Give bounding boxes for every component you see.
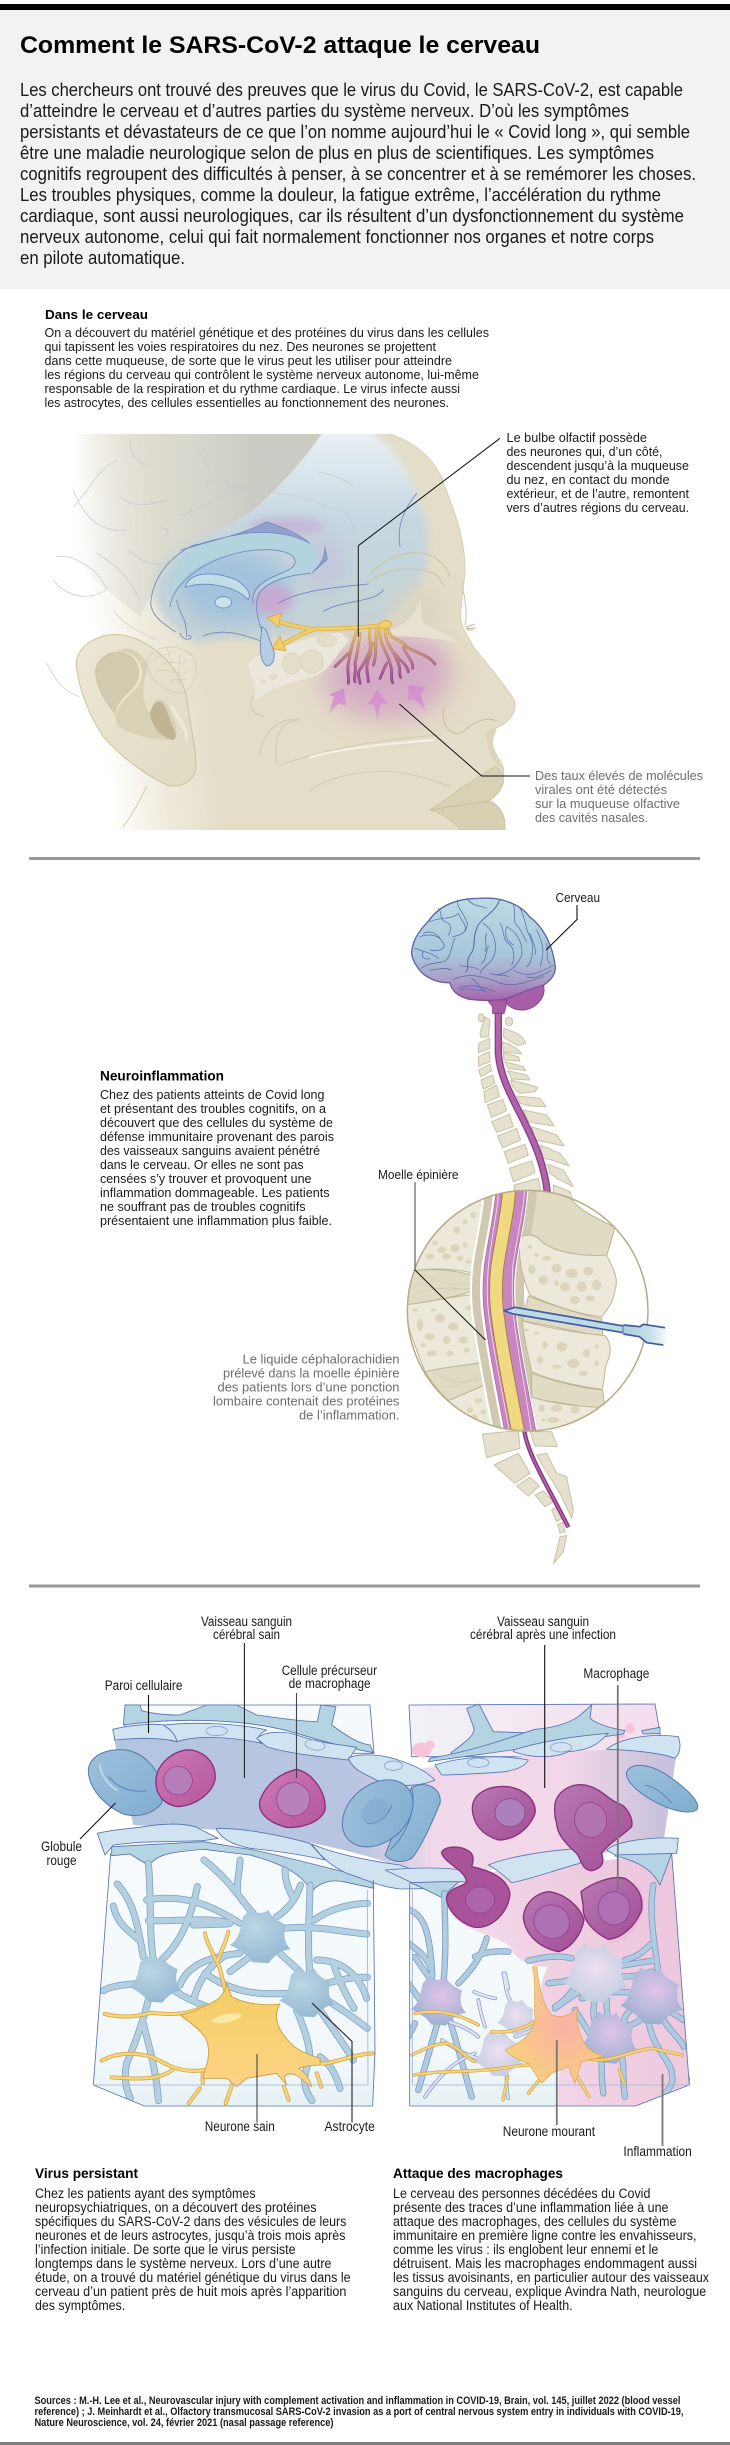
astrocytes, right [408,1885,684,2098]
divider [29,857,700,860]
right panel [385,1704,698,2106]
lower wall endfeet, right [410,1853,672,1897]
leader: Moelle épinière [415,1182,486,1340]
heading: Neuroinflammation: Neuroinflammation [100,1068,224,1084]
intro paragraph: être une maladie neurologique selon de plus en plus de scientifiques. Les symptômes [20,142,654,163]
bottom rule [0,2442,730,2445]
right vertebra 1 [519,1235,616,1317]
label: Vaisseau sanguin cérébral après une infection: cérébral après une infection [470,1627,616,1642]
head contour [390,434,515,830]
magnifier circle: spine cross-section [406,1190,667,1432]
disc 2 [425,1363,483,1400]
intro paragraph: en pilote automatique. [20,247,185,268]
text block: Attaque des macrophages: Le cerveau des personnes décédées du Covid [393,2186,650,2201]
sources: Nature Neuroscience, vol. 24, février 2021 (nasal passage reference) [34,2417,334,2429]
text block: Attaque des macrophages: détruisent. Mais les macrophages endommagent aussi [393,2256,697,2271]
label: Cerveau: Cerveau [556,890,600,905]
intro paragraph [20,79,696,268]
upper vertebrae [478,1014,573,1198]
callout: viral molecules: des cavités nasales. [535,810,648,825]
divider [29,1584,700,1588]
text block: Virus persistant: étude, on a trouvé du matériel génétique du virus dans le [35,2270,351,2285]
descending olfactory neurons [335,629,435,683]
text block: Virus persistant: des symptômes. [35,2298,125,2313]
illustration: head profile with olfactory pathway [40,423,530,830]
text block: Virus persistant: neurones et de leurs astrocytes, jusqu’à trois mois après [35,2228,346,2243]
wall cell nuclei, right [468,1743,572,1864]
text block: Attaque des macrophages: aux National Institutes of Health. [393,2298,573,2313]
text block: Dans le cerveau: dans cette muqueuse, de sorte que le virus peut les utiliser pour atteindre [44,353,452,368]
text block: Dans le cerveau: responsable de la respiration et du rythme cardiaque. Le virus infecte aussi [44,381,460,396]
callout: viral molecules: sur la muqueuse olfactive [535,796,680,811]
sources [34,2395,684,2429]
left vertebra 3 [449,1386,490,1424]
callout: cerebrospinal fluid: des patients lors d’une ponction [218,1380,400,1394]
text block: Virus persistant [35,2186,351,2313]
ventricle drop [260,627,274,666]
label: Neurone sain: Neurone sain [205,2119,275,2134]
lips [430,767,504,810]
text block: Attaque des macrophages: immunitaire en première ligne contre les envahisseurs, [393,2228,696,2243]
callout: olfactory bulb: du nez, en contact du monde [506,472,670,487]
pink spots [412,1723,635,1757]
text block: Attaque des macrophages: sanguins du cerveau, explique Avindra Nath, neurologue [393,2284,706,2299]
intro paragraph: d’atteindre le cerveau et d’autres parties du système nerveux. D’où les symptômes [20,100,629,121]
label: Inflammation: Inflammation [623,2144,692,2159]
white thin line in meninges [487,1190,531,1433]
ventricle wedge [180,522,310,551]
right bone upper disc [522,1188,615,1256]
text block: Virus persistant: cerveau d’un patient près de huit mois après l’apparition [35,2284,346,2299]
text block: Neuroinflammation: ne souffrant pas de troubles cognitifs [100,1199,306,1214]
label: Cellule précurseur de macrophage [282,1663,377,1691]
left vertebra 2 [408,1294,479,1372]
label: Paroi cellulaire: Paroi cellulaire [105,1678,182,1693]
macrophage B [555,1785,632,1871]
skin of head [40,434,515,830]
intro paragraph: nerveux autonome, celui qui fait normalement fonctionner nos organes et notre corps [20,226,654,247]
facial creases [123,697,450,827]
red blood cell 2 [329,1766,426,1861]
macrophage precursor 1 [156,1750,215,1807]
vessel lumen [113,1735,677,1887]
eyelash [465,624,476,630]
text block: Neuroinflammation: dans le cerveau. Or elles ne sont pas [100,1157,304,1172]
callout: olfactory bulb: Le bulbe olfactif possède [506,430,647,445]
text block: Attaque des macrophages: attaque des macrophages, des cellules du système [393,2214,676,2229]
label: Astrocyte: Astrocyte [324,2119,375,2134]
brain [412,898,555,1013]
lower wall cells, left [97,1824,447,1889]
macrophage C [442,1847,510,1927]
meninges, pink [498,1190,521,1433]
disc 1 [408,1269,471,1304]
text block: Attaque des macrophages: les tissus avoisinants, en particulier autour des vaisseaux [393,2270,709,2285]
text block: Dans le cerveau: les régions du cerveau qui contrôlent le système nerveux autonome, lui-même [44,367,479,382]
illustration: blood vessels healthy vs infected [88,1704,698,2106]
cerebellum [503,985,544,1010]
macrophage E [581,1878,642,1939]
dying neuron [412,1967,682,2100]
sinus cell holes [261,635,337,684]
brainstem [487,1000,507,1013]
fornix [185,574,249,600]
white gap left of cord [476,1190,498,1433]
right back box [409,1704,663,1757]
left back box [125,1705,374,1753]
callout: olfactory bulb: vers d’autres régions du cerveau. [506,500,689,515]
right disc 3 [532,1373,605,1410]
left lower box [93,1853,375,2106]
text block: Virus persistant: longtemps dans le système nerveux. Lors d’une autre [35,2256,332,2271]
text block: Attaque des macrophages: présente des traces d’une inflammation liée à une [393,2200,668,2215]
bridge of nose bone [390,600,460,643]
bottom inner lines, left box [93,1853,375,2106]
callout: olfactory bulb [506,430,689,515]
right vertebra 2 [523,1321,610,1389]
cord yellow [496,1190,518,1433]
back endfeet, right [428,1704,660,1762]
bottom outlines, right box [410,1853,689,2106]
callout: cerebrospinal fluid: de l’inflammation. [299,1408,400,1422]
ear canal shadow [150,702,176,740]
lower vertebrae and sacrum [482,1431,573,1564]
fade from brain into skin at cranium base [392,584,416,610]
text block: Neuroinflammation: et présentant des troubles cognitifs, on a [100,1101,327,1116]
text block: Virus persistant: neuropsychiatriques, on a découvert des protéines [35,2200,317,2215]
callout: viral molecules [535,768,703,825]
text block: Neuroinflammation: censées s’y trouver et provoquent une [100,1171,312,1186]
text block: Virus persistant: l’infection initiale. De sorte que le virus persiste [35,2242,296,2257]
callout: viral molecules: Des taux élevés de molécules [535,768,703,783]
corpus band [170,532,319,607]
lower wall cells, right [385,1838,678,1883]
text block: Dans le cerveau: On a découvert du matériel génétique et des protéines du virus dans les cellules [44,325,489,340]
pink inflammation zone [445,1853,689,2106]
text block: Attaque des macrophages [393,2186,709,2313]
label: Globule rouge [41,1839,82,1868]
cerebrum [412,898,555,1000]
red blood cell 3 [385,1785,440,1862]
ear inner concha [95,648,177,740]
mucosa magenta glow [323,637,450,720]
nuclei outlines of wall cells [169,1726,402,1870]
label: Vaisseau sanguin cérébral sain: Vaisseau sanguin [201,1614,292,1629]
sulci [415,900,553,992]
intro paragraph: Les troubles physiques, comme la douleur, la fatigue extrême, l’accélération du rythme [20,184,661,205]
title: Comment le SARS-CoV-2 attaque le cerveau [20,32,540,59]
right disc 2 [523,1296,603,1337]
cells of the upper vessel wall, left [113,1723,435,1785]
leader: Cerveau [546,905,577,950]
label: Moelle épinière: Moelle épinière [378,1167,458,1182]
cells of the upper vessel wall, right [435,1733,680,1775]
astrocytes, left [103,1860,367,2101]
label: Macrophage: Macrophage [583,1666,649,1681]
skull bone around sinuses [248,633,350,701]
text block: Dans le cerveau [44,325,489,410]
heading: Attaque des macrophages: Attaque des macrophages [393,2165,563,2181]
red blood cell 1 [88,1750,163,1816]
top black rule [0,4,730,10]
right lower box [410,1853,689,2106]
cancellous bone holes [413,1212,601,1423]
callout: cerebrospinal fluid [213,1352,400,1422]
back astrocyte endfeet, left [123,1705,373,1753]
intro paragraph: cardiaque, sont aussi neurologiques, car ils résultent d’un dysfonctionnement du système [20,205,684,226]
text block: Virus persistant: spécifiques du SARS-CoV-2 dans des vésicules de leurs [35,2214,347,2229]
text block: Neuroinflammation: des vaisseaux sanguins avaient pénétré [100,1143,320,1158]
translucent brain area [153,423,428,643]
purple upward arrows [327,685,426,722]
grey hair zone [73,434,322,617]
label: Globule rouge: rouge [46,1853,76,1868]
nose wing [443,707,497,733]
text block: Neuroinflammation: inflammation dommageable. Les patients [100,1185,330,1200]
neuron healthy [102,1932,373,2103]
red blood cell right [626,1765,698,1812]
dura beige band [476,1190,498,1433]
heading: Virus persistant: Virus persistant [35,2165,138,2181]
right beige band [520,1190,539,1433]
heading: Dans le cerveau: Dans le cerveau [45,308,148,322]
callout: olfactory bulb: descendent jusqu’à la muqueuse [506,458,689,473]
intro panel background [0,10,730,289]
small ventricle oval [215,597,232,608]
text block: Neuroinflammation [100,1087,334,1228]
illustration: brain and spine [412,898,573,1564]
callout: cerebrospinal fluid: lombaire contenait des protéines [213,1394,400,1408]
lower wall endfeet, left [112,1842,374,1893]
temporal fissure lines, brow [368,553,466,625]
callout: cerebrospinal fluid: Le liquide céphalorachidien [242,1352,400,1366]
text block: Dans le cerveau: qui tapissent les voies respiratoires du nez. Des neurones se projettent [44,339,436,354]
macrophage D [523,1892,584,1952]
callout: olfactory bulb: extérieur, et de l’autre, remontent [506,486,689,501]
macrophage A [472,1786,535,1840]
faint gyri [47,440,357,697]
leader lines [358,438,530,776]
callout: cerebrospinal fluid: prélevé dans la moelle épinière [223,1366,400,1380]
brain midline outlines [151,493,417,641]
text block: Neuroinflammation: découvert que des cellules du système de [100,1115,333,1130]
text block: Dans le cerveau: les astrocytes, des cellules essentielles au fonctionnement des neurones. [44,395,449,410]
callout: viral molecules: virales ont été détectés [535,782,667,797]
text block: Attaque des macrophages: comme les virus : ils englobent leur ennemi et le [393,2242,658,2257]
right vertebra 3 [531,1397,600,1437]
text block: Neuroinflammation: défense immunitaire provenant des parois [100,1129,334,1144]
label: Globule rouge: Globule [41,1839,82,1854]
lumbar puncture needle [504,1307,670,1345]
callout: olfactory bulb: des neurones qui, d’un côté, [506,444,662,459]
text block: Virus persistant: Chez les patients ayant des symptômes [35,2186,256,2201]
label: Vaisseau sanguin cérébral sain: cérébral sain [213,1627,280,1642]
label: Vaisseau sanguin cérébral après une infection [470,1614,616,1642]
left bone background [416,1200,482,1274]
yellow olfactory trunk and arrows [268,613,392,651]
leader lines for vessel labels [80,1643,662,2146]
circle rim [407,1190,648,1431]
text block: Neuroinflammation: Chez des patients atteints de Covid long [100,1087,324,1102]
mastoid squiggle [147,647,196,693]
ear [76,635,196,786]
macrophage precursor 2 [259,1769,325,1827]
label: Vaisseau sanguin cérébral sain [201,1614,292,1642]
label: Cellule précurseur de macrophage: Cellule précurseur [282,1663,377,1678]
label: Neurone mourant: Neurone mourant [503,2124,595,2139]
spinal cord [498,1012,568,1527]
text block: Neuroinflammation: présentaient une inflammation plus faible. [100,1213,332,1228]
label: Cellule précurseur de macrophage: de macrophage [289,1676,371,1691]
label: Vaisseau sanguin cérébral après une infection: Vaisseau sanguin [497,1614,589,1629]
disc stripes [416,1275,543,1387]
blue ventricle glow [177,550,290,623]
